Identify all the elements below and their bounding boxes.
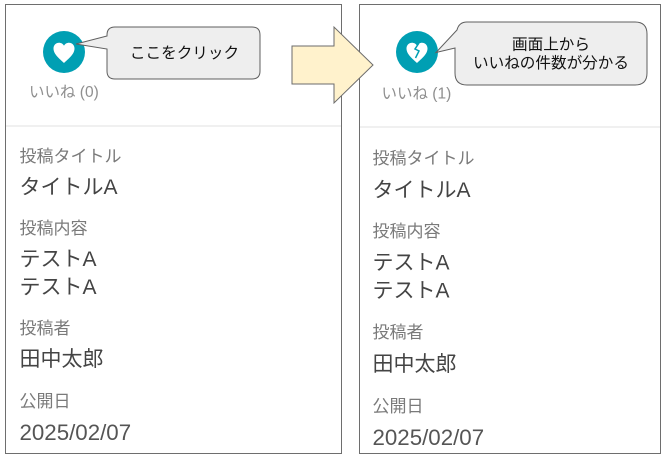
field: post content: 投稿内容 [372, 222, 440, 241]
field: post content [20, 219, 97, 299]
arrow: before to after [292, 27, 373, 103]
field: publish date: 公開日 [372, 397, 424, 416]
field: post content: 投稿内容 [20, 219, 88, 238]
field: post content: テストA [372, 252, 450, 274]
field: author: 田中太郎 [372, 353, 456, 376]
field: publish date [372, 397, 484, 450]
panel: after click [360, 4, 660, 454]
callout: count visible on screen [436, 22, 647, 85]
callout: click here: ここをクリック [130, 44, 239, 62]
field: post content: テストA [20, 248, 97, 271]
field: author [372, 323, 456, 376]
field: post title: タイトルA [372, 179, 471, 202]
like button: liked broken heart [396, 31, 438, 73]
field: post title [372, 149, 474, 202]
like count label: いいね (1) [382, 84, 451, 102]
field: publish date: 公開日 [20, 392, 70, 411]
field: publish date: 2025/02/07 [20, 420, 131, 445]
like button: unliked heart [43, 31, 85, 73]
field: author: 投稿者 [20, 319, 70, 338]
like count label: いいね (0) [29, 83, 99, 101]
field: post content [372, 222, 450, 302]
callout: click here [76, 27, 260, 79]
field: post title: タイトルA [20, 176, 118, 199]
field: author: 投稿者 [372, 323, 424, 342]
callout: count visible on screen: 画面上から [512, 36, 590, 54]
field: post title [20, 147, 122, 199]
panel: before click [6, 4, 342, 454]
field: post title: 投稿タイトル [372, 149, 474, 168]
field: publish date [20, 392, 131, 445]
field: post title: 投稿タイトル [20, 147, 122, 166]
field: post content: テストA [372, 280, 450, 302]
field: author [20, 319, 104, 371]
field: post content: テストA [20, 276, 97, 299]
field: publish date: 2025/02/07 [372, 425, 484, 450]
field: author: 田中太郎 [20, 348, 104, 371]
callout: count visible on screen: いいねの件数が分かる [473, 54, 629, 72]
